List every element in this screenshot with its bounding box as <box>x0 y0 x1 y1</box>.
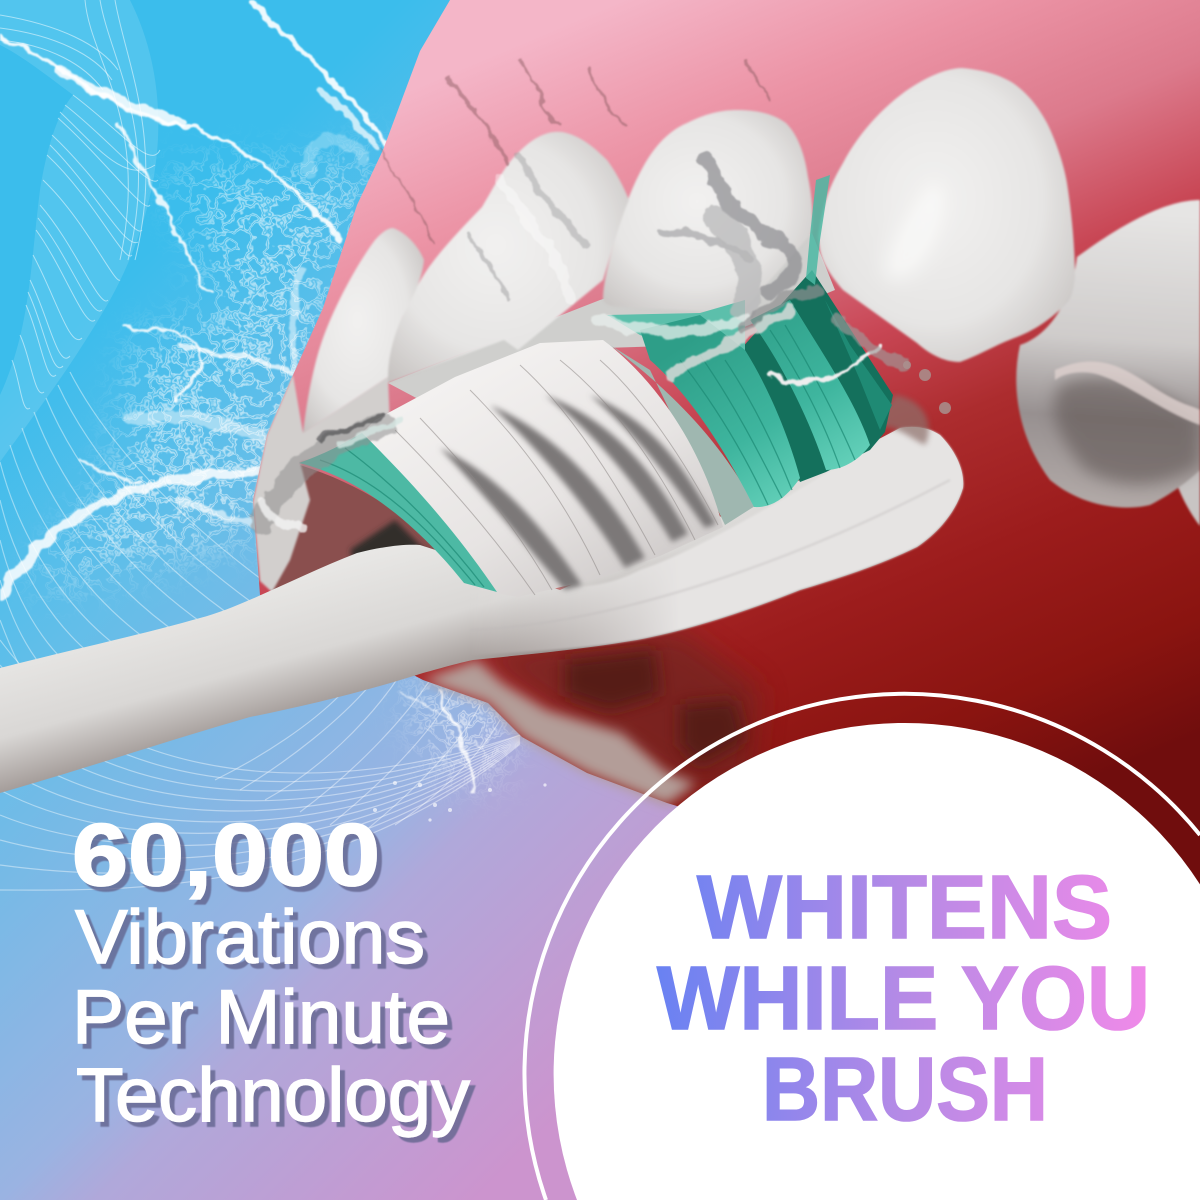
lower blurred teeth <box>423 660 696 805</box>
mouth interior behind bristles <box>270 465 480 590</box>
canine highlight <box>884 180 944 281</box>
ribbon lines <box>0 0 160 409</box>
molar dark hollow <box>1054 377 1200 484</box>
teal tuft far right <box>825 300 892 430</box>
head gray shadow near tip <box>870 395 929 445</box>
tooth: far right lower edge <box>1178 470 1200 526</box>
number: 60,000 <box>72 805 380 904</box>
white circle <box>554 723 1200 1200</box>
droplets right of brush <box>903 361 951 414</box>
water caustic foam <box>30 130 510 780</box>
dark shadows under brush <box>565 650 745 765</box>
gray splash on incisor <box>705 160 794 290</box>
teal band at tooth line <box>607 300 745 350</box>
line: Vibrations: Vibrations <box>75 895 425 980</box>
white bristle fine strokes <box>395 360 718 595</box>
shadow: lobe two <box>680 700 745 765</box>
head surface <box>470 427 963 655</box>
left teal bristles <box>299 433 497 592</box>
gray splash on second tooth <box>520 155 585 245</box>
head ridge highlight <box>470 480 950 630</box>
water splash left <box>0 0 472 790</box>
mouth interior dark spot <box>350 520 435 565</box>
toothbrush <box>0 175 963 793</box>
handle and head <box>0 427 963 793</box>
gray splash left tooth <box>262 425 385 520</box>
line: Technology: Technology <box>76 1053 470 1138</box>
tooth: incisor 3 <box>303 228 424 433</box>
tooth: incisor 2 <box>387 132 629 383</box>
tooth: right molar <box>1016 200 1200 508</box>
caption: vibrations <box>72 805 470 1138</box>
molar reflection <box>1055 361 1200 425</box>
shadow: lobe one <box>565 650 660 710</box>
fan mesh lines <box>0 372 520 890</box>
teal sliver between teeth <box>806 175 830 285</box>
pale backing behind bristles <box>388 233 835 400</box>
gums <box>253 0 1200 1000</box>
ribbon fill <box>0 0 158 462</box>
white bristle mass <box>362 340 723 597</box>
headline <box>657 858 1150 1140</box>
ribbon mesh top left <box>0 0 160 462</box>
tooth: large canine <box>818 68 1075 362</box>
brown area under head <box>470 630 760 790</box>
teal fine strokes <box>320 325 855 587</box>
line: BRUSH: BRUSH <box>762 1040 1048 1140</box>
dark teal backing <box>740 270 893 482</box>
line: Per Minute: Per Minute <box>72 975 450 1060</box>
water splash over teeth <box>262 155 905 525</box>
tooth: incisor 1 <box>603 110 813 313</box>
teal tuft right <box>750 300 870 470</box>
water droplets lower <box>373 781 547 822</box>
teeth <box>253 68 1200 592</box>
line: WHITENS: WHITENS <box>697 858 1112 958</box>
line: WHILE YOU: WHILE YOU <box>657 949 1150 1049</box>
tooth: left gray tooth <box>253 375 390 592</box>
white bristle gaps <box>440 395 716 590</box>
teal tuft large <box>640 315 800 507</box>
gray-teal back tuft <box>610 345 755 525</box>
gum streaks <box>380 60 770 245</box>
outer ring <box>524 694 1200 1200</box>
